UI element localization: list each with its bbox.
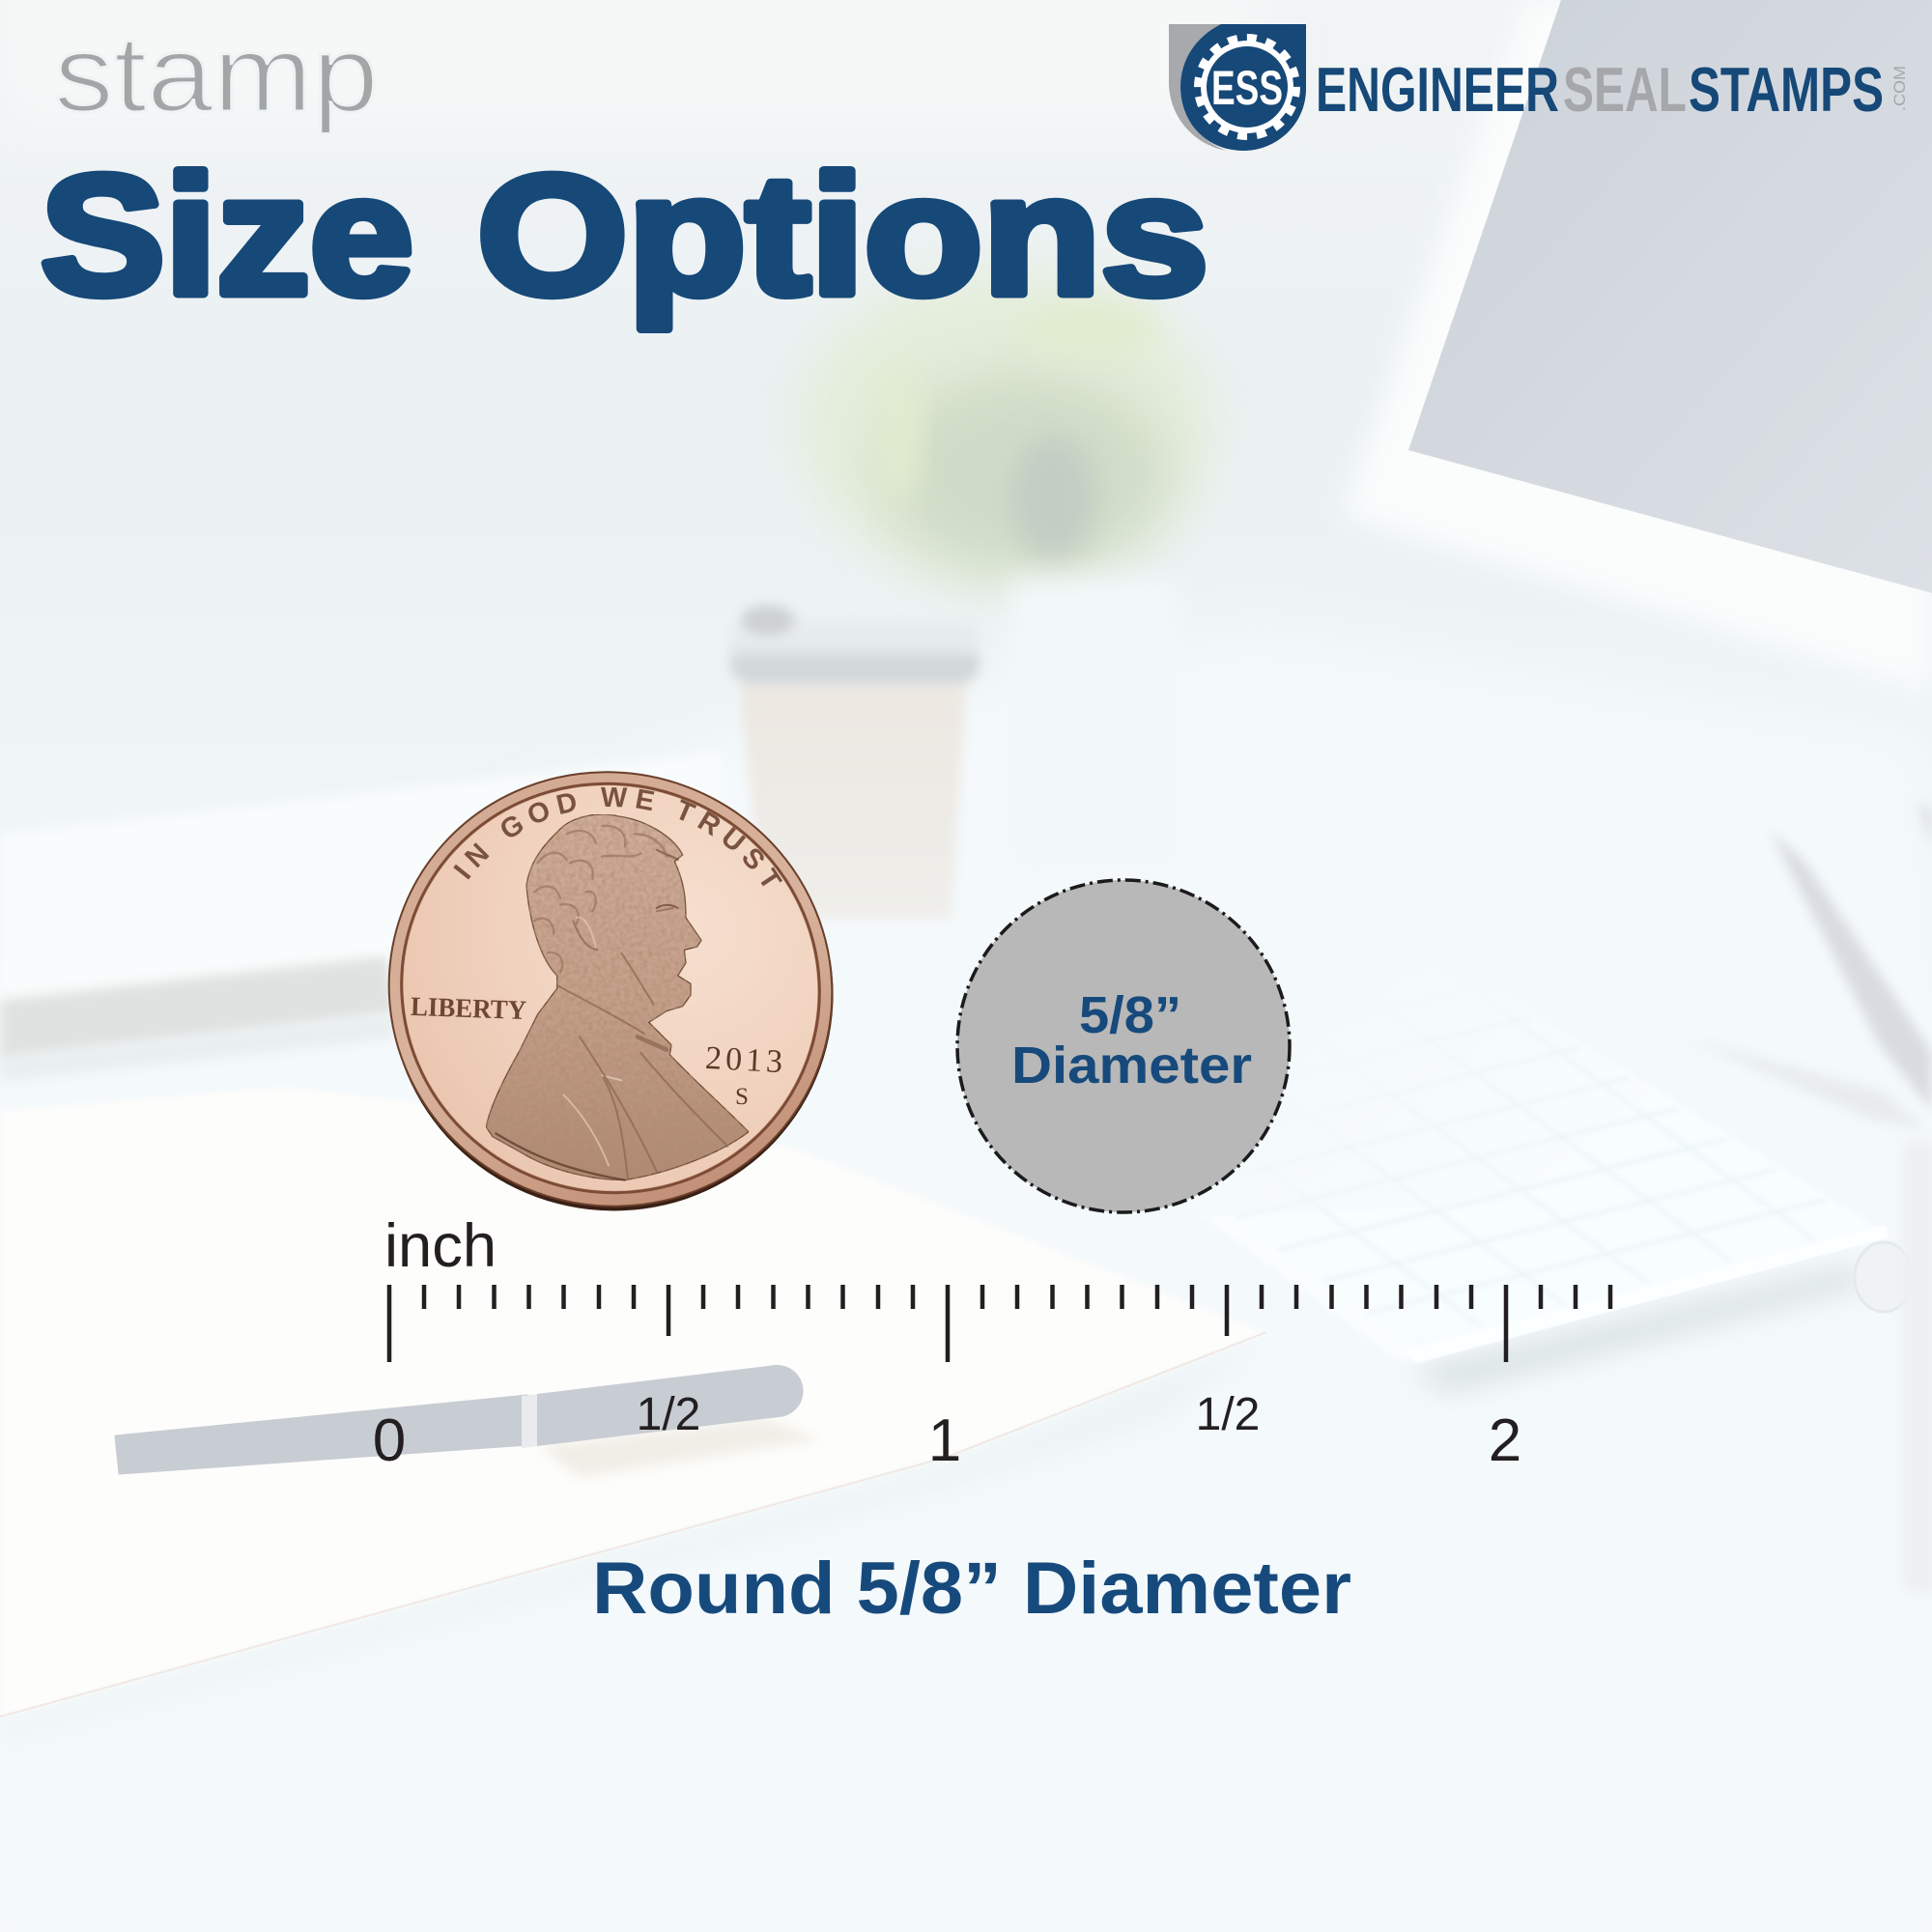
stamp impression circle [957, 880, 1290, 1212]
title: Size Options: Options [477, 141, 1208, 330]
logo wordmark [1316, 54, 1884, 125]
Lincoln bust [486, 814, 749, 1180]
title: Size Options [41, 141, 1208, 330]
fabric cup at right [1901, 1140, 1932, 1594]
keyboard front edge [1404, 1225, 1889, 1363]
caption: Round 5/8 Diameter: Round 5/8” Diameter [592, 1548, 1351, 1630]
ruler numbers: 1/2 [637, 1389, 700, 1440]
circle label: Diameter [1011, 1037, 1252, 1094]
logo wordmark: SEAL [1563, 54, 1687, 125]
circle label [1011, 986, 1252, 1094]
paper shadow [0, 1338, 1266, 1739]
title: Size Options: Size [41, 141, 413, 330]
hair curls [534, 826, 678, 973]
paper bottom edge [0, 1332, 1266, 1717]
coin face [346, 727, 875, 1249]
ruler numbers: 1 [928, 1407, 961, 1474]
ruler numbers [373, 1389, 1521, 1474]
logo .com: .COM [1890, 66, 1909, 111]
logo wordmark: ENGINEER [1316, 54, 1559, 125]
coin motto: IN GOD WE TRUST [453, 786, 782, 887]
pencils [1686, 802, 1932, 1130]
small heading: stamp: stamp [54, 14, 379, 134]
circle label: 5/8” [1079, 986, 1181, 1044]
paper sheet [0, 1087, 1266, 1718]
pen on paper [116, 1365, 821, 1478]
ruler unit label: inch [384, 1212, 497, 1280]
coin Liberty: LIBERTY [411, 992, 527, 1026]
logo shield [1169, 24, 1306, 151]
monitor bezel [1345, 0, 1932, 692]
desk surface [0, 628, 1932, 1932]
monitor screen [1408, 0, 1932, 593]
plant pot [1009, 580, 1179, 869]
penny coin for scale [388, 771, 834, 1211]
logo shield: ESS [1211, 61, 1283, 115]
face and coat modelling [496, 905, 727, 1180]
ruler in inches [373, 1212, 1610, 1474]
ruler numbers: 2 [1489, 1407, 1521, 1474]
coin rim [327, 710, 894, 1268]
plant foliage [797, 270, 1212, 580]
ruler numbers: 1/2 [1196, 1389, 1260, 1440]
top window glow [0, 0, 1256, 126]
logo: Engineer Seal Stamps [1169, 24, 1909, 151]
keyboard roller [1855, 1242, 1913, 1312]
ruler ticks [389, 1285, 1610, 1362]
book at left [0, 753, 734, 1082]
keyboard [956, 956, 1913, 1363]
coin date: 2013 [704, 1040, 783, 1080]
coin mint mark: S [735, 1084, 749, 1110]
keyboard shadow [1410, 1265, 1864, 1391]
ruler numbers: 0 [373, 1407, 406, 1474]
coffee cup [730, 605, 980, 918]
